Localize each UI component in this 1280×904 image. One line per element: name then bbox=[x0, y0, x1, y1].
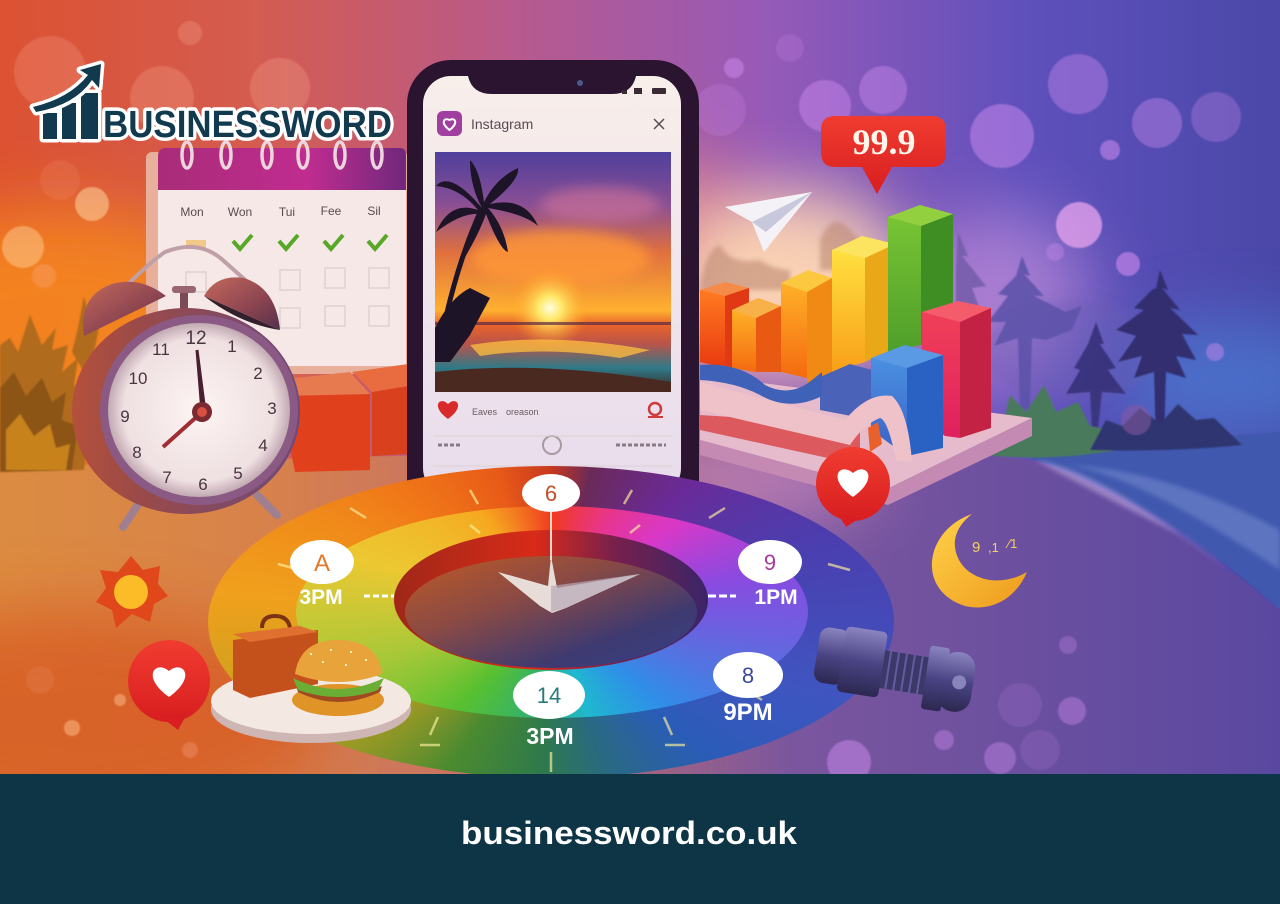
time wheel bbox=[208, 466, 894, 778]
label: 6 bbox=[522, 474, 580, 512]
label: 3PM left: 3PM bbox=[299, 586, 343, 609]
icon: alarm clock: 3 bbox=[267, 399, 277, 418]
background trees left bbox=[0, 296, 104, 472]
phone bbox=[407, 60, 699, 540]
label: 9PM bottom right: 8 bbox=[742, 663, 754, 688]
label: 1PM right bbox=[708, 540, 802, 609]
icon: alarm clock: 8 bbox=[132, 443, 142, 462]
icon: dumbbell bbox=[811, 622, 979, 716]
icon: heart bubble right bbox=[816, 447, 890, 527]
icon: calendar: Won bbox=[228, 205, 252, 219]
background trees right bbox=[956, 232, 1242, 458]
instagram header bbox=[437, 111, 664, 136]
bar chart platform bbox=[700, 375, 1032, 505]
icon: heart bubble left bbox=[128, 640, 210, 730]
icon: alarm clock: 1 bbox=[227, 337, 237, 356]
label: 3PM bottom: 14 bbox=[537, 683, 561, 708]
icon: calendar: Fee bbox=[321, 204, 342, 218]
icon: alarm clock bbox=[72, 247, 300, 527]
post photo: sunset beach bbox=[435, 152, 671, 392]
label: 6: 6 bbox=[545, 481, 557, 506]
icon: alarm clock: 11 bbox=[152, 340, 170, 359]
label: 3PM bottom bbox=[513, 671, 585, 749]
icon: alarm clock: 10 bbox=[129, 369, 147, 388]
footer url: businessword.co.uk bbox=[461, 815, 797, 851]
label: 3PM left bbox=[290, 540, 394, 609]
label: 1PM right: 1PM bbox=[754, 586, 798, 609]
icon: crescent moon: ,1 bbox=[988, 540, 999, 555]
icon: crescent moon: 9 bbox=[972, 539, 980, 556]
icon: alarm clock: 2 bbox=[253, 364, 263, 383]
icon: alarm clock: 12 bbox=[185, 328, 207, 349]
burger bbox=[292, 640, 384, 716]
icon: plate with briefcase and burger bbox=[211, 616, 411, 743]
bar chart bbox=[700, 205, 991, 456]
wheel centre bbox=[394, 508, 708, 670]
label: 9PM bottom right bbox=[713, 652, 783, 726]
logo wordmark: BUSINESSWORD bbox=[103, 104, 392, 146]
label: 3PM bottom: 3PM bbox=[526, 723, 574, 749]
label: 3PM left: A bbox=[314, 550, 330, 577]
icon: sun bbox=[96, 556, 168, 628]
icon: crescent moon: ⁄1 bbox=[1005, 536, 1017, 551]
callout: likes badge: 99.9 bbox=[852, 122, 916, 162]
label: 1PM right: 9 bbox=[764, 550, 776, 575]
icon: calendar: Mon bbox=[180, 205, 204, 219]
instagram header: Instagram bbox=[471, 116, 533, 132]
icon: alarm clock: 5 bbox=[233, 464, 243, 483]
callout: likes badge bbox=[821, 116, 946, 194]
distant trees behind chart bbox=[700, 222, 860, 290]
label: 9PM bottom right: 9PM bbox=[723, 699, 773, 726]
logo bars and arrow bbox=[33, 64, 101, 139]
icon: calendar: Tui bbox=[279, 205, 295, 219]
icon: alarm clock: 7 bbox=[162, 468, 172, 487]
icon: alarm clock: 9 bbox=[120, 407, 130, 426]
post actions bbox=[433, 401, 672, 466]
post actions: oreason bbox=[506, 407, 539, 417]
icon: calendar: Sil bbox=[367, 204, 381, 218]
icon: crescent moon bbox=[932, 514, 1027, 608]
icon: alarm clock: 4 bbox=[258, 436, 268, 455]
post actions: Eaves bbox=[472, 407, 498, 417]
icon: paper plane bbox=[725, 192, 812, 252]
icon: alarm clock: 6 bbox=[198, 475, 208, 494]
blocks under calendar bbox=[280, 364, 408, 472]
footer band bbox=[0, 774, 1280, 904]
icon: calendar bbox=[146, 142, 408, 374]
logo: Businessword bbox=[33, 64, 392, 146]
chart ribbons bbox=[700, 365, 912, 462]
